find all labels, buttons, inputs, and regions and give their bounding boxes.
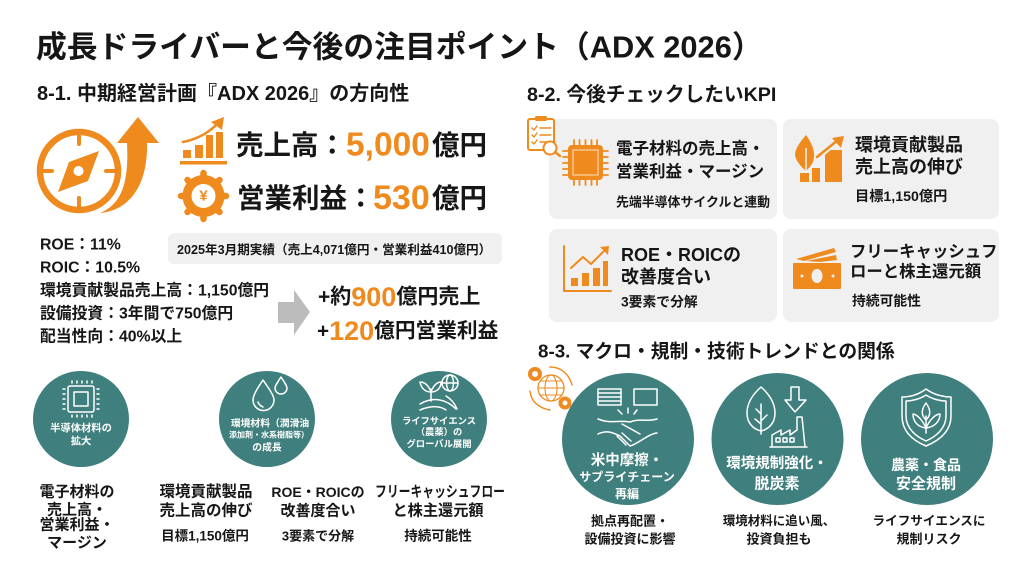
circle: US-China friction: 再編 (615, 486, 639, 501)
circle: semiconductor materials: 拡大 (71, 434, 91, 448)
growth topic: environmental products: 目標1,150億円 (161, 528, 249, 544)
growth topic: ROE ROIC: ROE・ROICの (271, 484, 365, 500)
icon: leaf, down arrow and factory (747, 387, 807, 447)
growth topic: environmental products: 環境貢献製品 (159, 482, 253, 500)
icon: yen gear (181, 173, 226, 219)
icon: chip (563, 140, 608, 185)
growth topic: free cash flow: フリーキャッシュフロー (375, 484, 505, 500)
sales target: 億円 (432, 130, 487, 160)
icon: flags and handshake (598, 389, 657, 446)
circle: life science: ライフサイエンス (402, 416, 476, 426)
growth topic: electronic materials: マージン (47, 534, 107, 552)
target metrics list: ROIC：10.5% (40, 260, 140, 276)
growth topic: electronic materials: 営業利益・ (39, 516, 115, 534)
circle: life science: グローバル展開 (406, 438, 472, 449)
sales target (236, 126, 487, 164)
panel: KPI free cash flow: フリーキャッシュフ (850, 243, 998, 261)
growth topic: electronic materials: 売上高・ (47, 502, 107, 518)
panel: KPI electronic materials: 営業利益・マージン (616, 162, 764, 181)
operating profit target: 億円 (432, 182, 487, 214)
target metrics list (40, 236, 269, 346)
circle: semiconductor materials (33, 371, 129, 467)
growth topic: environmental products (159, 482, 253, 544)
caption: US-China friction: 設備投資に影響 (584, 532, 676, 546)
circle: environmental materials: 添加剤・水系樹脂等） (229, 430, 309, 440)
caption: US-China friction (584, 514, 676, 546)
panel: KPI environmental products: 目標1,150億円 (855, 188, 947, 205)
circle: environmental regulation (712, 373, 844, 505)
target metrics list: ROE：11% (40, 236, 121, 254)
panel: KPI free cash flow: ローと株主還元額 (850, 262, 982, 281)
circle: pesticide and food safety (861, 373, 993, 505)
caption: life science risk (873, 514, 985, 546)
icon: chip outline (63, 381, 99, 417)
icon: yen gear: ¥ (199, 188, 208, 204)
target metrics list: 設備投資：3年間で750億円 (40, 304, 233, 322)
circle: US-China friction: 米中摩擦・ (591, 451, 663, 469)
icon: water drops (253, 377, 287, 410)
increase callout: +120億円営業利益 (317, 316, 499, 346)
caption: US-China friction: 拠点再配置・ (591, 514, 669, 528)
growth topic: electronic materials: 電子材料の (39, 482, 115, 500)
panel: KPI free cash flow (783, 229, 999, 322)
growth topic: ROE ROIC: 3要素で分解 (282, 528, 354, 544)
sales target: 5,000 (346, 126, 430, 164)
increase callout: +約900億円売上 (318, 282, 480, 312)
panel: KPI electronic materials (549, 119, 777, 219)
panel: KPI ROE ROIC (549, 229, 777, 322)
circle: environmental materials: 環境材料（潤滑油 (231, 416, 309, 430)
icon: leaf and growth bars (795, 135, 844, 182)
target metrics list: 環境貢献製品売上高：1,150億円 (40, 280, 269, 300)
icon: shield with plant (902, 389, 951, 446)
arrow: grey block arrow (278, 290, 310, 335)
sales target: 売上高： (236, 130, 346, 160)
panel: KPI electronic materials: 電子材料の売上高・ (616, 138, 764, 158)
increase callout (317, 282, 499, 346)
operating profit target (237, 179, 487, 217)
panel: KPI ROE ROIC: 3要素で分解 (621, 294, 698, 310)
caption: life science risk: 規制リスク (896, 532, 962, 546)
panel: KPI ROE ROIC: 改善度合い (621, 267, 711, 287)
growth topic: ROE ROIC (271, 484, 365, 544)
icon: sales bar chart (180, 117, 227, 164)
operating profit target: 営業利益： (237, 182, 374, 214)
operating profit target: 530 (373, 179, 430, 217)
icon: banknotes (793, 248, 841, 289)
circle: environmental regulation: 脱炭素 (754, 474, 800, 492)
circle: pesticide and food safety: 安全規制 (896, 474, 956, 492)
caption: environmental regulation: 環境材料に追い風、 (723, 513, 835, 528)
icon: globe with gears (530, 367, 572, 410)
FY2025 actuals pill (168, 233, 502, 264)
circle: environmental materials (219, 371, 315, 467)
circle: life science (391, 371, 487, 467)
icon: clipboard checklist with magnifier (528, 116, 560, 156)
icon: sprout, globe and field (420, 375, 458, 410)
growth topic: environmental products: 売上高の伸び (159, 502, 253, 520)
heading: 8-2: 8-2. 今後チェックしたいKPI (527, 84, 776, 106)
heading: 8-1: 8-1. 中期経営計画『ADX 2026』の方向性 (37, 82, 409, 105)
target metrics list: 配当性向：40%以上 (40, 326, 182, 346)
circle: semiconductor materials: 半導体材料の (50, 422, 112, 434)
circle: environmental regulation: 環境規制強化・ (726, 455, 828, 472)
panel: KPI electronic materials: 先端半導体サイクルと連動 (616, 194, 770, 210)
panel: KPI free cash flow: 持続可能性 (852, 292, 921, 308)
icon: line and bar chart (564, 246, 611, 291)
circle: environmental materials: の成長 (252, 440, 282, 454)
caption: life science risk: ライフサイエンスに (873, 514, 985, 528)
caption: environmental regulation: 投資負担も (746, 532, 812, 546)
caption: environmental regulation (723, 513, 835, 546)
panel: KPI ROE ROIC: ROE・ROICの (621, 245, 741, 265)
title: 成長ドライバーと今後の注目ポイント（ADX 2026） (36, 30, 763, 64)
growth topic: free cash flow (375, 484, 505, 544)
circle: pesticide and food safety: 農薬・食品 (891, 457, 961, 473)
FY2025 actuals pill: 2025年3月期実績（売上4,071億円・営業利益410億円） (177, 242, 491, 257)
growth topic: electronic materials (39, 482, 115, 552)
circle: US-China friction (562, 373, 694, 505)
growth topic: free cash flow: 持続可能性 (404, 528, 472, 544)
circle: US-China friction: サプライチェーン (579, 470, 675, 484)
growth topic: ROE ROIC: 改善度合い (280, 502, 356, 520)
growth topic: free cash flow: と株主還元額 (392, 502, 484, 520)
panel: KPI environmental products: 環境貢献製品 (855, 135, 963, 155)
circle: life science: （農薬）の (416, 426, 462, 437)
icon: compass with rising arrow (40, 117, 159, 213)
panel: KPI environmental products (783, 119, 999, 219)
panel: KPI environmental products: 売上高の伸び (855, 157, 963, 177)
heading: 8-3: 8-3. マクロ・規制・技術トレンドとの関係 (538, 340, 895, 362)
